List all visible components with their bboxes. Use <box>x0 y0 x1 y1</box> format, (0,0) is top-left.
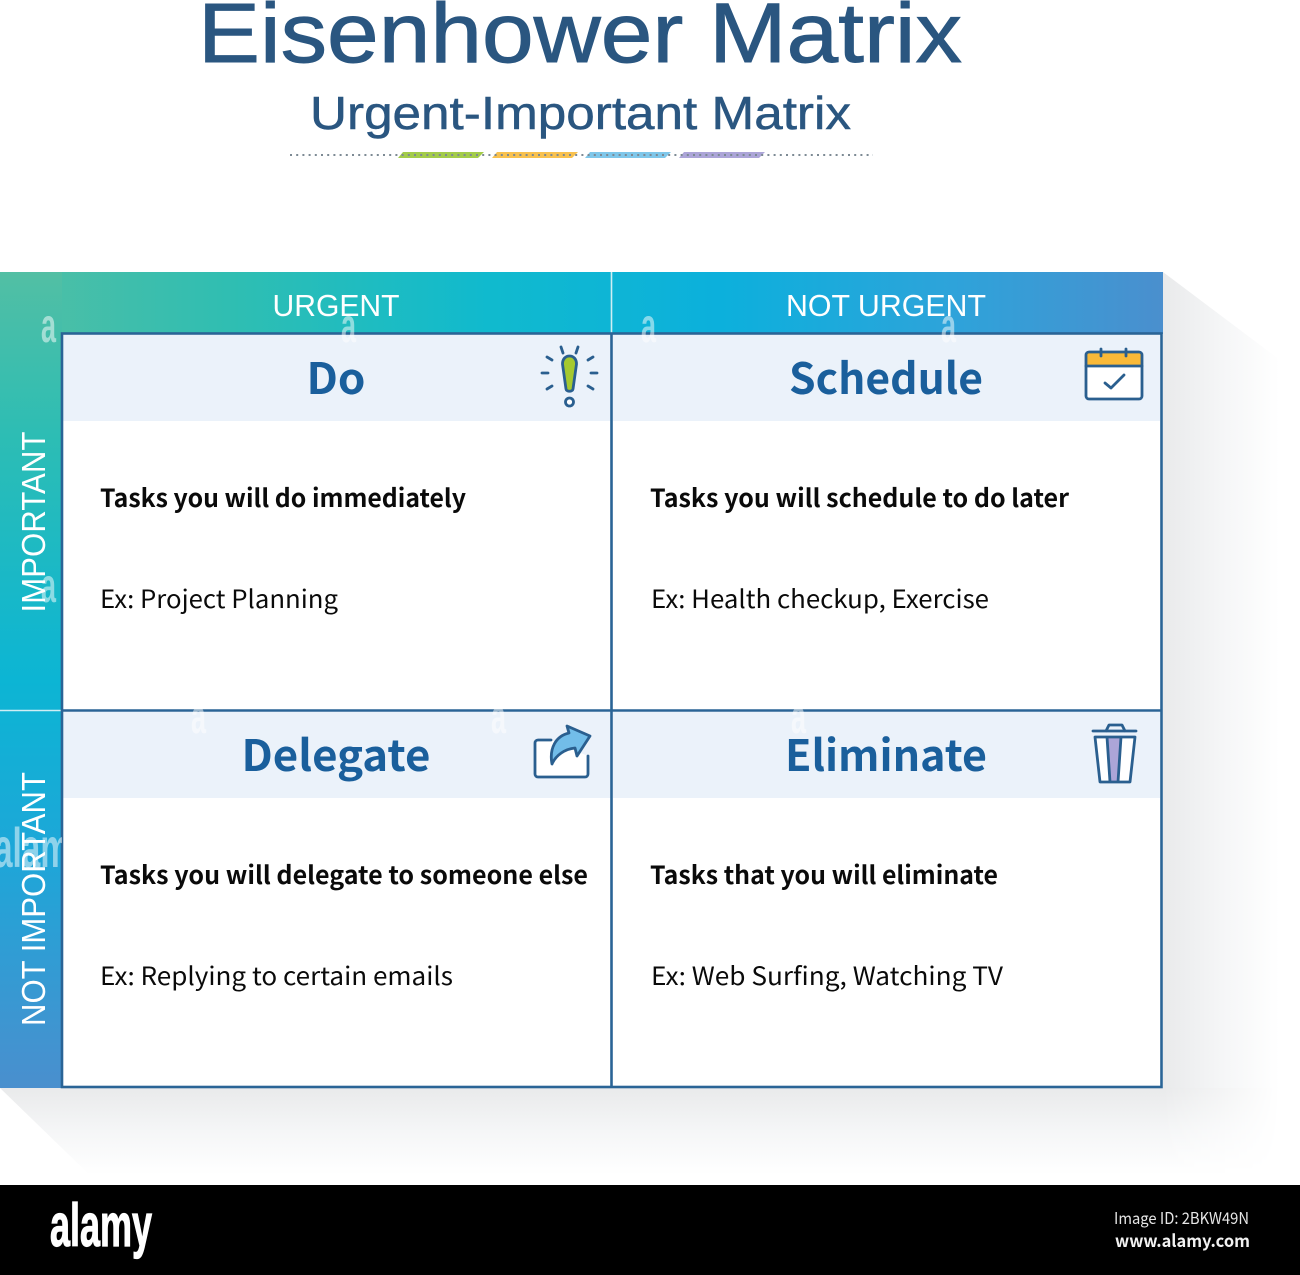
panel: delegate <box>63 712 611 993</box>
watermark marks <box>0 300 956 879</box>
website: www.alamy.com <box>1115 1227 1250 1252</box>
description: schedule: Tasks you will schedule to do later <box>650 479 1069 515</box>
footer logo: alamy <box>50 1192 152 1259</box>
heading: eliminate: Eliminate <box>785 722 987 784</box>
column label: urgent: URGENT <box>272 288 400 323</box>
watermark marks: a <box>41 300 56 353</box>
watermark marks: a <box>791 691 806 744</box>
watermark marks: a <box>191 691 206 744</box>
drop shadow <box>0 272 1300 1185</box>
example: do: Ex: Project Planning <box>100 580 338 616</box>
heading: do: Do <box>306 345 366 407</box>
panel: schedule <box>613 335 1160 616</box>
left header band <box>0 272 62 1088</box>
icon: exclamation <box>542 347 597 406</box>
watermark marks: a <box>641 300 656 353</box>
icon: calendar <box>1086 349 1142 399</box>
row label: not important: NOT IMPORTANT <box>15 772 52 1026</box>
description: delegate: Tasks you will delegate to someone else <box>100 856 588 892</box>
watermark marks: a <box>41 560 56 613</box>
watermark marks: a <box>941 300 956 353</box>
watermark marks: a <box>341 300 356 353</box>
subtitle: Urgent-Important Matrix <box>310 87 851 139</box>
top header band <box>0 272 1163 334</box>
example: delegate: Ex: Replying to certain emails <box>100 957 453 993</box>
dotted divider with coloured segments <box>290 152 873 158</box>
footer bar <box>0 1185 1300 1275</box>
matrix body <box>62 334 1161 1087</box>
description: eliminate: Tasks that you will eliminate <box>650 856 998 892</box>
heading: delegate: Delegate <box>242 722 430 784</box>
watermark marks: a <box>491 691 506 744</box>
example: schedule: Ex: Health checkup, Exercise <box>651 580 989 616</box>
image id: Image ID: 2BKW49N <box>1114 1205 1249 1229</box>
panel: do <box>63 335 611 616</box>
heading: schedule: Schedule <box>789 345 983 407</box>
icon: share arrow <box>535 726 590 777</box>
row label: important: IMPORTANT <box>15 432 52 612</box>
column label: not urgent: NOT URGENT <box>786 288 986 323</box>
matrix grid lines <box>62 333 1162 1087</box>
description: do: Tasks you will do immediately <box>100 479 467 515</box>
example: eliminate: Ex: Web Surfing, Watching TV <box>651 957 1004 993</box>
icon: trash can <box>1093 725 1136 782</box>
panel: eliminate <box>613 712 1160 993</box>
header dividers <box>0 272 612 710</box>
